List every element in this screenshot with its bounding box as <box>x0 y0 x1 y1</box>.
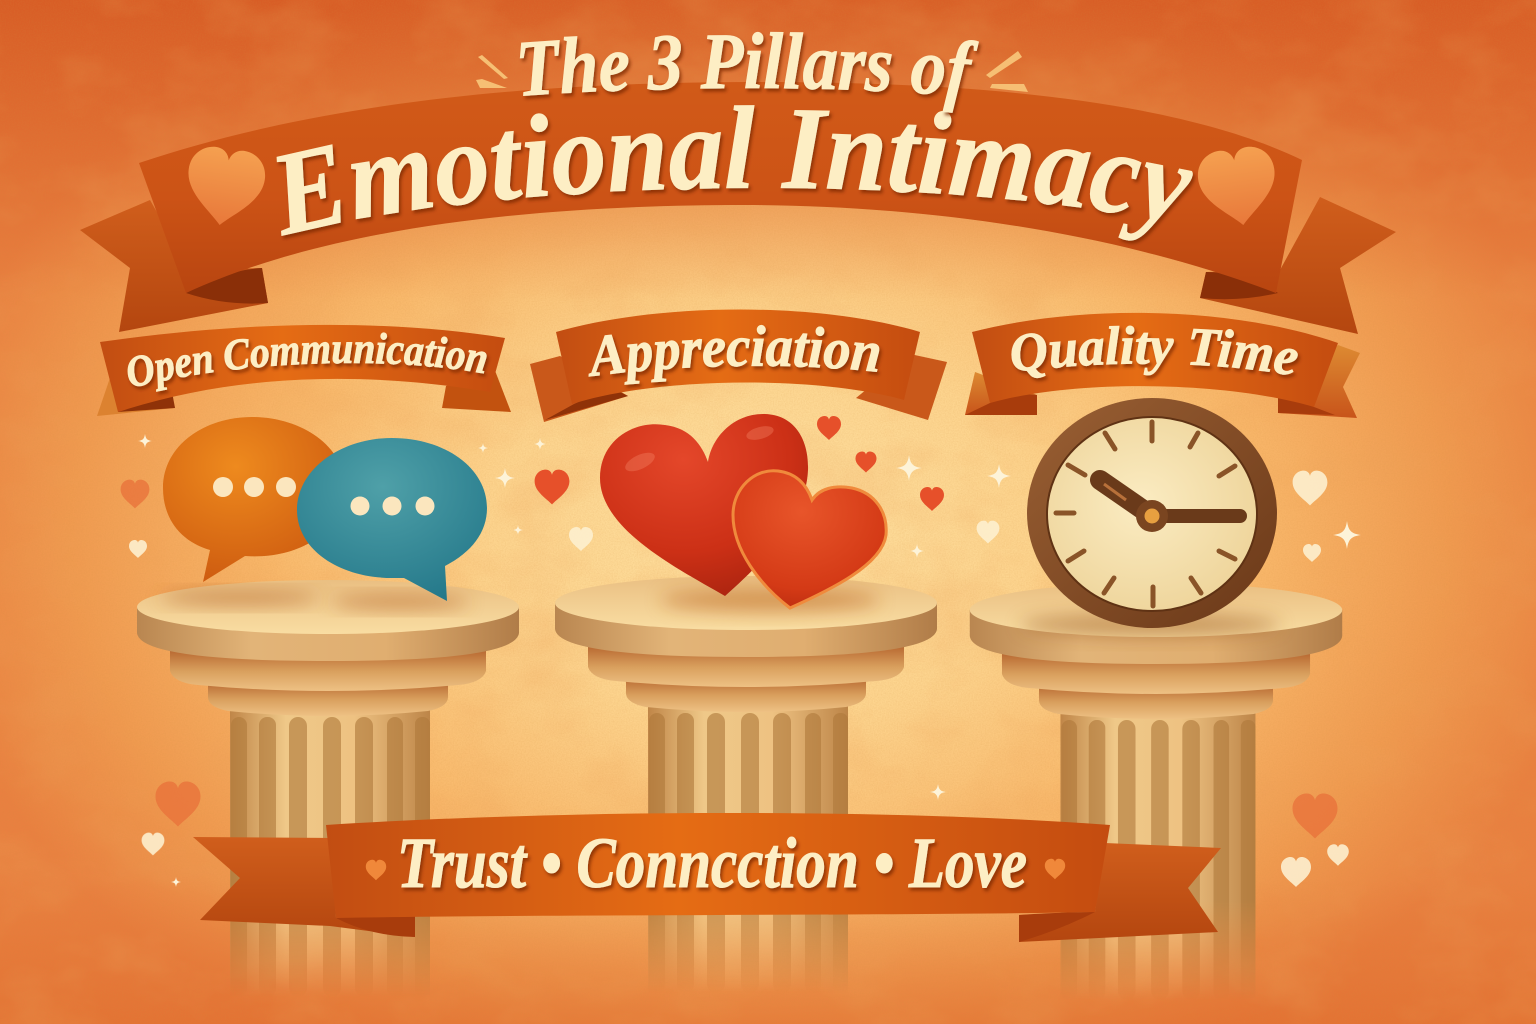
right ribbon tail <box>1019 843 1221 942</box>
pillar: open communication <box>137 580 519 997</box>
tagline: Trust • Conncction • Love <box>397 823 1027 903</box>
decorative hearts and sparkles <box>121 416 1361 887</box>
main title banner <box>80 82 1396 334</box>
banner body <box>139 82 1302 293</box>
banner body <box>326 813 1110 918</box>
icon: right heart <box>1195 144 1281 230</box>
orange speech bubble <box>163 417 345 582</box>
pillar: appreciation <box>555 576 937 993</box>
ribbon: Open Communication <box>97 324 511 416</box>
icon: left heart <box>182 144 268 230</box>
ribbon: Appreciation <box>530 310 947 422</box>
label: Quality Time <box>1011 326 1302 383</box>
left ribbon tail <box>193 837 415 937</box>
accent strokes around title <box>476 51 1028 92</box>
right ribbon tail <box>1200 197 1396 334</box>
icon: clock <box>1020 398 1280 637</box>
label: Appreciation <box>588 324 883 390</box>
icon: left small heart <box>366 860 386 880</box>
icon: speech bubbles <box>160 417 487 609</box>
left ribbon tail <box>80 200 268 332</box>
bottom banner <box>193 813 1221 942</box>
title line: Emotional Intimacy: Emotional Intimacy <box>276 105 1196 245</box>
pillar: quality time <box>970 583 1342 1000</box>
ribbon: Quality Time <box>965 312 1360 418</box>
teal speech bubble <box>297 438 487 601</box>
title line: The 3 Pillars of: The 3 Pillars of <box>520 32 982 118</box>
icon: two red hearts <box>600 414 886 612</box>
label: Open Communication <box>128 332 490 396</box>
icon: right small heart <box>1045 859 1065 879</box>
